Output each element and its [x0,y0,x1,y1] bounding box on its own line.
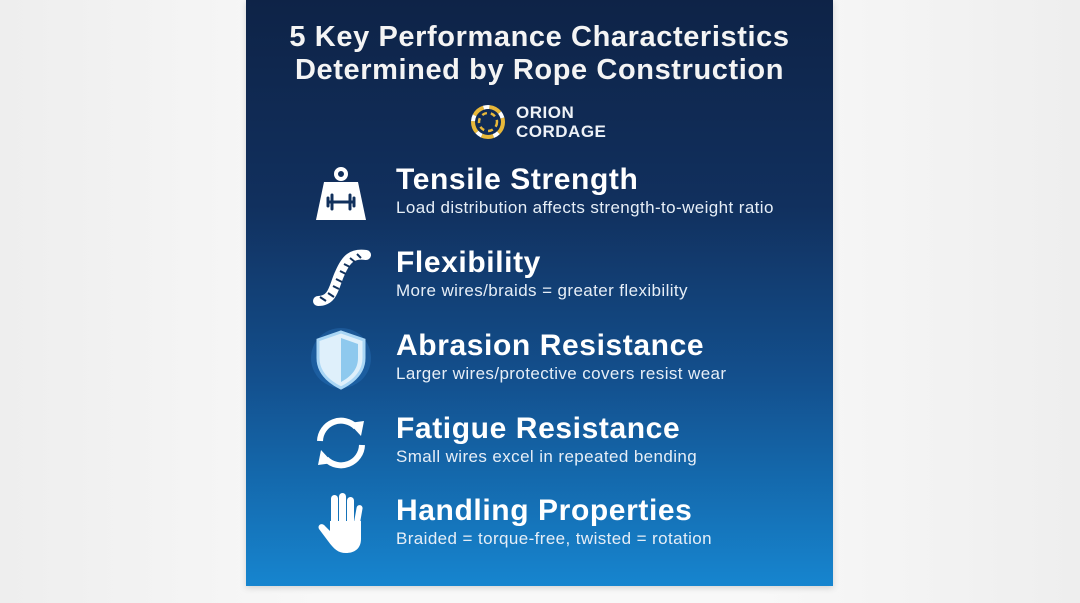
logo: Orion Cordage: ORION [516,103,574,122]
item: fatigue resistance [317,412,697,468]
title [289,21,790,86]
icon: shield [311,328,371,390]
item: handling properties: Handling Properties [396,494,692,527]
item: handling properties [318,493,712,553]
item: handling properties: Braided = torque-free, twisted = rotation [396,529,712,548]
item: flexibility: More wires/braids = greater flexibility [396,281,688,300]
item: tensile strength: Load distribution affects strength-to-weight ratio [396,198,774,217]
item: abrasion resistance [311,328,726,390]
logo: Orion Cordage: CORDAGE [516,122,606,141]
icon: rope [313,250,371,306]
item: fatigue resistance: Fatigue Resistance [396,412,680,445]
icon: cycle arrows [317,418,365,468]
item: flexibility [313,246,688,306]
item: tensile strength: Tensile Strength [396,163,638,196]
item: flexibility: Flexibility [396,246,541,279]
logo: Orion Cordage [471,103,606,141]
title: 5 Key Performance Characteristics [289,21,790,53]
item: tensile strength [316,163,774,220]
item: abrasion resistance: Larger wires/protective covers resist wear [396,364,726,383]
title: Determined by Rope Construction [295,54,784,86]
icon: hand [318,493,363,553]
icon: weight [316,167,366,220]
item: abrasion resistance: Abrasion Resistance [396,329,704,362]
item: fatigue resistance: Small wires excel in repeated bending [396,447,697,466]
panel: main card [246,0,833,586]
